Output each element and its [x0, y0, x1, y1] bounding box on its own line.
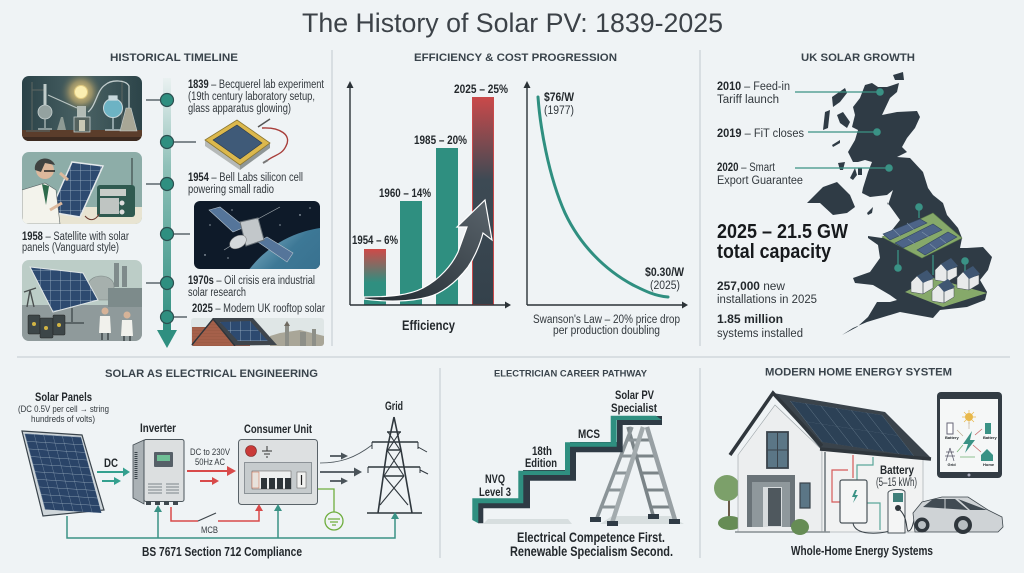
panel: historical timeline: solar research	[188, 287, 246, 299]
map: UK	[807, 72, 992, 335]
ground shadow	[483, 516, 684, 524]
panel: UK solar growth	[717, 52, 992, 340]
text: 1958 satellite: 1958 – Satellite with solar	[22, 231, 129, 243]
AC arrows	[187, 447, 236, 485]
tree and bushes	[714, 475, 742, 530]
step labels: NVQ	[485, 472, 505, 486]
house	[730, 393, 931, 535]
icon: pylon	[367, 399, 428, 513]
battery with wiring: (5–15 kWh)	[876, 477, 917, 489]
panel: electrician career pathway	[472, 368, 684, 559]
panel: solar as electrical engineering	[18, 368, 428, 559]
home caption: Whole-Home Energy Systems	[791, 544, 933, 558]
line chart: Swanson's law: Swanson's Law – 20% price drop	[533, 314, 680, 326]
image: Becquerel lab	[22, 70, 142, 141]
bar chart: efficiency: 2025 – 25%	[454, 84, 508, 96]
heading: efficiency and cost: EFFICIENCY & COST PROGRESSION	[414, 52, 617, 64]
heading: historical timeline: HISTORICAL TIMELINE	[110, 52, 238, 64]
image: UK rooftop solar	[191, 318, 324, 346]
consumer unit: Consumer Unit	[244, 422, 312, 436]
line chart: Swanson's law	[524, 81, 688, 337]
inverter: Inverter	[140, 421, 176, 435]
icon: houses on map	[905, 258, 987, 307]
MCB line	[171, 504, 263, 535]
image: scientist with panel and radio	[22, 152, 142, 224]
text: 1970s oil crisis: 1970s – Oil crisis era industrial	[188, 275, 315, 287]
label: solar panels: hundreds of volts)	[31, 414, 95, 425]
text: installation stats: 257,000 new	[717, 281, 786, 293]
ladder	[591, 427, 679, 525]
text: 1954 Bell Labs: 1954 – Bell Labs silicon cell	[188, 172, 303, 184]
heading: modern home: MODERN HOME ENERGY SYSTEM	[765, 366, 952, 378]
career tagline: Electrical Competence First.	[517, 529, 665, 545]
tablet app: Battery	[983, 435, 998, 440]
step labels: MCS	[578, 427, 600, 441]
panel: historical timeline: glass apparatus glowing)	[188, 103, 291, 115]
text: UK milestones: 2010 – Feed-in	[717, 81, 790, 93]
tablet app	[937, 392, 1002, 478]
EV charger	[888, 489, 915, 533]
tablet app: Grid	[948, 462, 956, 467]
icon: pylon: Grid	[385, 399, 403, 413]
map callout lines and dots	[795, 88, 969, 275]
text: total capacity: 2025 – 21.5 GW	[717, 221, 848, 243]
electric car	[913, 497, 1003, 534]
line chart: Swanson's law: (2025)	[650, 280, 680, 292]
step labels: 18th	[532, 444, 552, 458]
battery with wiring	[832, 455, 917, 533]
text: UK milestones	[717, 81, 804, 187]
heading: career pathway: ELECTRICIAN CAREER PATHWAY	[494, 368, 648, 380]
step labels: Solar PV	[615, 388, 654, 402]
text: installation stats: systems installed	[717, 328, 803, 340]
step labels: Level 3	[479, 485, 511, 499]
AC arrows: 50Hz AC	[195, 457, 225, 468]
text: 2025 rooftop: 2025 – Modern UK rooftop solar	[192, 303, 325, 315]
icon: solar panel	[22, 431, 104, 516]
image: 1970s industrial research	[22, 260, 142, 341]
label: solar panels	[18, 390, 109, 425]
DC arrows: DC	[104, 456, 118, 470]
label: solar panels: (DC 0.5V per cell → string	[18, 404, 109, 415]
text: 1839 Becquerel: 1839 – Becquerel lab experiment	[188, 79, 325, 91]
line chart: Swanson's law: $76/W	[544, 92, 574, 104]
line chart: Swanson's law: $0.30/W	[645, 267, 684, 279]
career tagline: Renewable Specialism Second.	[510, 543, 673, 559]
heading: UK solar growth: UK SOLAR GROWTH	[801, 52, 915, 64]
timeline axis	[146, 78, 196, 348]
text: total capacity	[717, 221, 848, 263]
icon: solar farm on map	[882, 213, 962, 258]
output arrows	[320, 445, 372, 484]
panel: efficiency and cost progression	[346, 52, 688, 337]
text: UK milestones: Tariff launch	[717, 94, 779, 106]
bar chart: efficiency: 1954 – 6%	[352, 235, 398, 247]
career tagline	[510, 529, 673, 559]
icon: silicon cell	[205, 119, 288, 170]
panel: historical timeline: (19th century laboratory setup,	[188, 91, 315, 103]
text: UK milestones: 2019 – FiT closes	[717, 128, 804, 140]
image: satellite over Earth	[194, 201, 320, 269]
tablet app: Battery	[945, 435, 960, 440]
earth connection	[318, 489, 343, 530]
text: total capacity: total capacity	[717, 241, 832, 263]
MCB line: MCB	[201, 525, 218, 535]
text: installation stats	[717, 281, 817, 340]
bar chart: efficiency: 1960 – 14%	[379, 188, 431, 200]
label: solar panels: Solar Panels	[35, 390, 92, 404]
step labels: Edition	[525, 456, 557, 470]
line chart: Swanson's law: (1977)	[544, 105, 574, 117]
line chart: Swanson's law: per production doubling	[553, 325, 660, 337]
consumer unit	[238, 422, 318, 504]
step labels: Specialist	[611, 401, 657, 415]
arrow: rising efficiency	[364, 200, 492, 301]
text: UK milestones: Export Guarantee	[717, 175, 803, 187]
panel: historical timeline	[22, 54, 325, 348]
text: UK milestones: 2020 – Smart	[717, 162, 776, 174]
compliance line	[67, 504, 399, 559]
panel: historical timeline: powering small radio	[188, 184, 274, 196]
panel: modern home energy system	[714, 366, 1003, 558]
compliance line: BS 7671 Section 712 Compliance	[142, 544, 302, 559]
bar chart: efficiency: Efficiency	[402, 317, 455, 333]
AC arrows: DC to 230V	[190, 447, 231, 458]
tablet app: Home	[983, 462, 995, 467]
text: installation stats: 1.85 million	[717, 314, 783, 326]
panel: historical timeline: panels (Vanguard style)	[22, 242, 119, 254]
DC arrows	[97, 456, 130, 485]
battery with wiring: Battery	[880, 465, 915, 477]
bar chart: efficiency	[346, 81, 511, 333]
title: The History of Solar PV: 1839-2025	[302, 8, 723, 38]
inverter	[133, 421, 184, 505]
text: installation stats: installations in 2025	[717, 294, 817, 306]
step labels	[479, 388, 657, 499]
staircase	[472, 416, 662, 523]
bar chart: efficiency: 1985 – 20%	[414, 135, 467, 147]
heading: solar as electrical engineering: SOLAR AS ELECTRICAL ENGINEERING	[105, 368, 318, 380]
